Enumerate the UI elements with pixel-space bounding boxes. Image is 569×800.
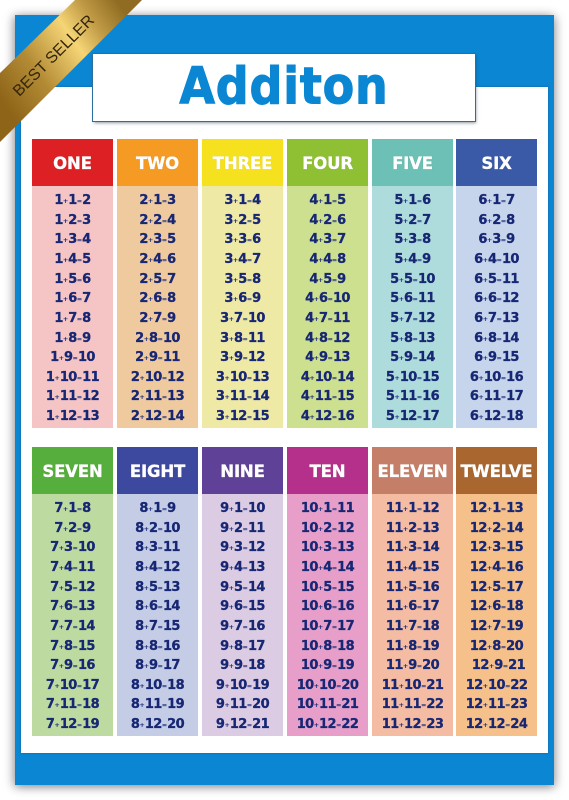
sums: one: 1+9=10 (50, 350, 95, 365)
sums: one: 1+7=8 (54, 311, 91, 326)
sums: eleven: 11+5=16 (386, 580, 439, 595)
sums: eight: 8+11=19 (131, 697, 184, 712)
sums: one: 1+8=9 (54, 331, 91, 346)
sums: six: 6+10=16 (470, 370, 523, 385)
sums: seven: 7+2=9 (54, 521, 91, 536)
panel: nine (202, 447, 283, 736)
heading: one (32, 139, 113, 186)
sums: twelve: 12+1=13 (470, 501, 523, 516)
sums: seven: 7+11=18 (46, 697, 99, 712)
sums: twelve (456, 494, 537, 736)
sums: nine: 9+8=17 (220, 639, 265, 654)
sums: eleven: 11+3=14 (386, 540, 439, 555)
sums: six: 6+11=17 (470, 389, 523, 404)
sums: five: 5+2=7 (394, 213, 431, 228)
sums: three: 3+9=12 (220, 350, 265, 365)
sums: eleven: 11+8=19 (386, 639, 439, 654)
sums: four: 4+12=16 (301, 409, 354, 424)
heading: four: FOUR (302, 154, 353, 173)
sums: three: 3+7=10 (220, 311, 265, 326)
heading: eight (117, 447, 198, 494)
sums: five: 5+12=17 (386, 409, 439, 424)
heading: ten: TEN (310, 462, 345, 481)
sums: five: 5+3=8 (394, 232, 431, 247)
sums: two: 2+7=9 (139, 311, 176, 326)
sums: one: 1+5=6 (54, 272, 91, 287)
sums: nine: 9+5=14 (220, 580, 265, 595)
sums: eleven: 11+2=13 (386, 521, 439, 536)
sums: eleven: 11+9=20 (386, 658, 439, 673)
sums: nine: 9+12=21 (216, 717, 269, 732)
sums: ten: 10+4=14 (301, 560, 354, 575)
sums: four: 4+9=13 (305, 350, 350, 365)
sums: five: 5+7=12 (390, 311, 435, 326)
sums: two: 2+5=7 (139, 272, 176, 287)
sums: one: 1+2=3 (54, 213, 91, 228)
sums: nine: 9+11=20 (216, 697, 269, 712)
sums: twelve: 12+11=23 (466, 697, 527, 712)
sums: eleven: 11+6=17 (386, 599, 439, 614)
sums: six: 6+5=11 (474, 272, 519, 287)
sums: six: 6+8=14 (474, 331, 519, 346)
sums: nine: 9+2=11 (220, 521, 265, 536)
sums: seven: 7+3=10 (50, 540, 95, 555)
sums: two: 2+10=12 (131, 370, 184, 385)
sums: five: 5+4=9 (394, 252, 431, 267)
sums: six: 6+6=12 (474, 291, 519, 306)
sums: ten (287, 494, 368, 736)
panel: seven (32, 447, 113, 736)
panel: four (287, 139, 368, 428)
panel: ten (287, 447, 368, 736)
sums: one: 1+10=11 (46, 370, 99, 385)
best seller ribbon (0, 0, 142, 142)
heading: eight: EIGHT (130, 462, 185, 481)
panel: twelve (456, 447, 537, 736)
heading: eleven: ELEVEN (377, 462, 448, 481)
sums: four: 4+8=12 (305, 331, 350, 346)
sums: one: 1+3=4 (54, 232, 91, 247)
sums: ten: 10+12=22 (297, 717, 358, 732)
sums: one: 1+1=2 (54, 193, 91, 208)
sums: three: 3+12=15 (216, 409, 269, 424)
panel: three (202, 139, 283, 428)
white content panel (21, 87, 548, 753)
sums: four: 4+2=6 (309, 213, 346, 228)
sums: four: 4+1=5 (309, 193, 346, 208)
sums: eleven: 11+12=23 (382, 717, 443, 732)
sums: five (372, 186, 453, 428)
heading: five (372, 139, 453, 186)
sums: eleven (372, 494, 453, 736)
sums: seven: 7+8=15 (50, 639, 95, 654)
heading: seven (32, 447, 113, 494)
sums: nine: 9+10=19 (216, 678, 269, 693)
heading: seven: SEVEN (42, 462, 103, 481)
panel: eight (117, 447, 198, 736)
sums: ten: 10+6=16 (301, 599, 354, 614)
sums: eleven: 11+10=21 (382, 678, 443, 693)
sums: ten: 10+1=11 (301, 501, 354, 516)
sums: three: 3+8=11 (220, 331, 265, 346)
sums: ten: 10+3=13 (301, 540, 354, 555)
sums: nine: 9+6=15 (220, 599, 265, 614)
sums: one (32, 186, 113, 428)
sums: ten: 10+7=17 (301, 619, 354, 634)
heading: three: THREE (213, 154, 272, 173)
sums: twelve: 12+4=16 (470, 560, 523, 575)
sums: twelve: 12+9=21 (472, 658, 525, 673)
sums: seven: 7+1=8 (54, 501, 91, 516)
sums: ten: 10+11=21 (297, 697, 358, 712)
title (93, 54, 475, 121)
sums: three: 3+1=4 (224, 193, 261, 208)
panel: six (456, 139, 537, 428)
sums: eight: 8+3=11 (135, 540, 180, 555)
sums: seven: 7+4=11 (50, 560, 95, 575)
panel: two (117, 139, 198, 428)
sums: two: 2+4=6 (139, 252, 176, 267)
sums: two: 2+12=14 (131, 409, 184, 424)
sums: four: 4+5=9 (309, 272, 346, 287)
sums: three: 3+2=5 (224, 213, 261, 228)
sums: seven (32, 494, 113, 736)
sums: seven: 7+9=16 (50, 658, 95, 673)
sums: two: 2+3=5 (139, 232, 176, 247)
sums: three: 3+5=8 (224, 272, 261, 287)
sums: four: 4+3=7 (309, 232, 346, 247)
sums: six: 6+2=8 (478, 213, 515, 228)
sums: two: 2+2=4 (139, 213, 176, 228)
sums: one: 1+12=13 (46, 409, 99, 424)
sums: nine: 9+9=18 (220, 658, 265, 673)
sums: three (202, 186, 283, 428)
sums: five: 5+5=10 (390, 272, 435, 287)
heading: three (202, 139, 283, 186)
sums: one: 1+6=7 (54, 291, 91, 306)
heading: five: FIVE (392, 154, 433, 173)
sums: seven: 7+7=14 (50, 619, 95, 634)
heading: two: TWO (136, 154, 179, 173)
sums: twelve: 12+12=24 (466, 717, 527, 732)
sums: eleven: 11+7=18 (386, 619, 439, 634)
title: Additon (179, 56, 389, 116)
sums: eight (117, 494, 198, 736)
sums: twelve: 12+10=22 (466, 678, 527, 693)
sums: two: 2+6=8 (139, 291, 176, 306)
sums: twelve: 12+2=14 (470, 521, 523, 536)
sums: three: 3+3=6 (224, 232, 261, 247)
sums: three: 3+6=9 (224, 291, 261, 306)
sums: two (117, 186, 198, 428)
sums: ten: 10+9=19 (301, 658, 354, 673)
sums: five: 5+9=14 (390, 350, 435, 365)
sums: two: 2+9=11 (135, 350, 180, 365)
sums: ten: 10+2=12 (301, 521, 354, 536)
heading: six: SIX (481, 154, 512, 173)
sums: one: 1+11=12 (46, 389, 99, 404)
sums: five: 5+11=16 (386, 389, 439, 404)
sums: four (287, 186, 368, 428)
sums: seven: 7+12=19 (46, 717, 99, 732)
heading: two (117, 139, 198, 186)
heading: twelve (456, 447, 537, 494)
sums: one: 1+4=5 (54, 252, 91, 267)
sums: six: 6+1=7 (478, 193, 515, 208)
sums: nine: 9+4=13 (220, 560, 265, 575)
sums: eleven: 11+1=12 (386, 501, 439, 516)
heading: six (456, 139, 537, 186)
sums: two: 2+1=3 (139, 193, 176, 208)
heading: twelve: TWELVE (460, 462, 533, 481)
sums: seven: 7+5=12 (50, 580, 95, 595)
sums: six: 6+4=10 (474, 252, 519, 267)
panel: eleven (372, 447, 453, 736)
heading: ten (287, 447, 368, 494)
sums: ten: 10+10=20 (297, 678, 358, 693)
sums: eight: 8+2=10 (135, 521, 180, 536)
panel: one (32, 139, 113, 428)
best seller ribbon: BEST SELLER (10, 12, 98, 100)
sums: three: 3+11=14 (216, 389, 269, 404)
sums: seven: 7+6=13 (50, 599, 95, 614)
sums: two: 2+11=13 (131, 389, 184, 404)
sums: eight: 8+4=12 (135, 560, 180, 575)
sums: eight: 8+6=14 (135, 599, 180, 614)
sums: eleven: 11+11=22 (382, 697, 443, 712)
heading: four (287, 139, 368, 186)
sums: eight: 8+10=18 (131, 678, 184, 693)
heading: nine: NINE (220, 462, 265, 481)
heading: one: ONE (53, 154, 92, 173)
sums: twelve: 12+7=19 (470, 619, 523, 634)
sums: four: 4+10=14 (301, 370, 354, 385)
sums: ten: 10+8=18 (301, 639, 354, 654)
sums: five: 5+1=6 (394, 193, 431, 208)
sums: six: 6+3=9 (478, 232, 515, 247)
sums: five: 5+8=13 (390, 331, 435, 346)
sums: nine: 9+1=10 (220, 501, 265, 516)
sums: seven: 7+10=17 (46, 678, 99, 693)
sums: three: 3+4=7 (224, 252, 261, 267)
sums: six: 6+12=18 (470, 409, 523, 424)
sums: six: 6+9=15 (474, 350, 519, 365)
sums: twelve: 12+3=15 (470, 540, 523, 555)
sums: four: 4+4=8 (309, 252, 346, 267)
sums: five: 5+6=11 (390, 291, 435, 306)
sums: four: 4+7=11 (305, 311, 350, 326)
sums: eight: 8+9=17 (135, 658, 180, 673)
sums: four: 4+11=15 (301, 389, 354, 404)
sums: eight: 8+1=9 (139, 501, 176, 516)
panel: five (372, 139, 453, 428)
sums: eight: 8+5=13 (135, 580, 180, 595)
sums: five: 5+10=15 (386, 370, 439, 385)
sums: eight: 8+8=16 (135, 639, 180, 654)
sums: four: 4+6=10 (305, 291, 350, 306)
sums: nine (202, 494, 283, 736)
sums: eleven: 11+4=15 (386, 560, 439, 575)
sums: ten: 10+5=15 (301, 580, 354, 595)
heading: nine (202, 447, 283, 494)
sums: twelve: 12+8=20 (470, 639, 523, 654)
sums: two: 2+8=10 (135, 331, 180, 346)
sums: nine: 9+3=12 (220, 540, 265, 555)
sums: six (456, 186, 537, 428)
sums: eight: 8+7=15 (135, 619, 180, 634)
sums: three: 3+10=13 (216, 370, 269, 385)
sums: twelve: 12+5=17 (470, 580, 523, 595)
sums: nine: 9+7=16 (220, 619, 265, 634)
sums: six: 6+7=13 (474, 311, 519, 326)
heading: eleven (372, 447, 453, 494)
sums: twelve: 12+6=18 (470, 599, 523, 614)
sums: eight: 8+12=20 (131, 717, 184, 732)
